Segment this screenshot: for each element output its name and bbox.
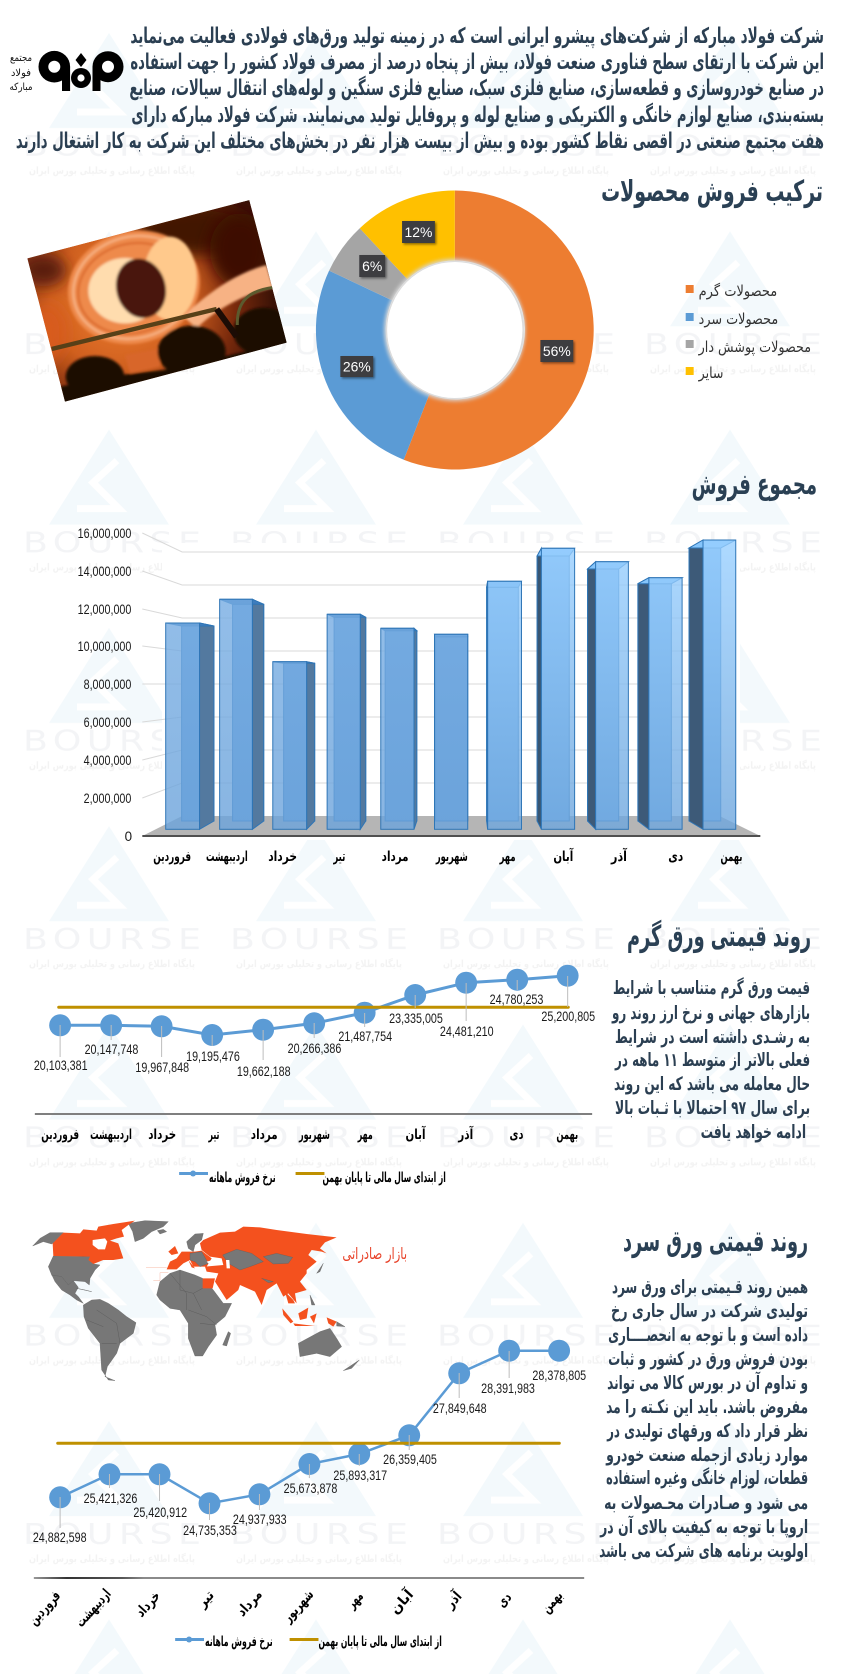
label 12%: 12% [405,224,432,240]
value labels: 27,849,648 [433,1401,487,1416]
x axis month labels: آبان [406,1125,426,1143]
value labels: 20,147,748 [85,1042,138,1057]
x axis month labels: خرداد [148,1127,176,1143]
segment: cold products 26% [316,271,429,460]
bar: Khordad [273,662,315,829]
bar: Ordibehesht [220,599,264,829]
rotated month labels: فروردین [26,1588,64,1629]
text block: hot sheet commentary: برای سال ۹۷ احتمالا با ثـبات بالا [615,1098,810,1119]
value labels: 19,967,848 [135,1060,189,1075]
value labels: 23,335,005 [389,1011,443,1026]
value labels: 20,103,381 [34,1058,88,1073]
x axis month labels: بهمن [721,849,742,865]
value labels: 25,420,912 [133,1505,187,1520]
rotated month labels: اردیبهشت [73,1586,114,1630]
line chart: cold sheet [26,1340,586,1650]
map caption: export market: بازار صادراتی [342,1244,407,1264]
value labels: 24,481,210 [440,1024,494,1039]
rotated month labels: آذر [440,1587,466,1613]
logo: Mobarakeh Steel: مجتمع [10,53,32,64]
value labels: 25,893,317 [333,1468,387,1483]
logo: Mobarakeh Steel: مبارکه [10,82,32,93]
Scandinavia [187,1233,203,1252]
x axis month labels [41,1125,578,1143]
text block: hot sheet commentary [611,977,810,1143]
value labels: 19,662,188 [237,1064,291,1079]
logo: Mobarakeh Steel [10,51,124,93]
label 56% [540,340,573,362]
bar: Mordad [381,628,417,829]
value labels [33,1368,586,1545]
chart floor [142,816,760,836]
value labels: 25,200,805 [541,1009,595,1024]
value labels: 24,882,598 [33,1530,87,1545]
legend [175,1634,442,1650]
legend: نرخ فروش ماهانه [205,1634,273,1650]
x axis month labels: دی [510,1127,523,1143]
value labels: 24,937,933 [233,1512,287,1527]
x axis month labels: مهر [357,1127,373,1143]
label 26% [340,356,373,377]
bar chart: total sales [78,526,760,865]
y axis labels: 2,000,000 [84,791,131,806]
x axis month labels: اردیبهشت [90,1127,132,1143]
value labels: 19,195,476 [186,1049,240,1064]
exporting countries [53,1221,337,1327]
rotated month labels: بهمن [538,1588,566,1617]
x axis month labels: تیر [333,849,345,865]
segment: coated products 6% [329,228,407,300]
segment: other 12% [360,190,455,279]
segment: hot products 56% [404,190,594,469]
x axis month labels: مهر [499,849,516,865]
rotated month labels: مهر [343,1589,367,1612]
donut legend: محصولات گرم [699,282,777,300]
bar: Shahrivar [435,634,468,829]
value labels: 28,391,983 [481,1381,535,1396]
y axis labels: 10,000,000 [78,639,131,654]
donut chart: product mix [316,190,594,469]
rotated month labels [26,1585,566,1630]
Australia [298,1328,342,1357]
value labels: 28,378,805 [532,1368,586,1383]
bar: Azar [588,562,628,829]
donut legend: محصولات سرد [699,310,778,328]
bar: Tir [327,614,366,829]
legend: از ابتدای سال مالی تا پایان بهمن [322,1170,446,1186]
rotated month labels: آبان [386,1585,418,1618]
label 6%: 6% [362,258,382,274]
donut legend: محصولات پوشش دار [698,338,811,357]
y axis labels: 0 [125,829,132,844]
world map: export markets [33,1221,359,1381]
donut legend: سایر [698,364,724,382]
x axis month labels: فروردین [153,849,191,865]
value labels: 25,421,326 [84,1491,137,1506]
x axis month labels: مرداد [382,849,409,865]
line chart: hot sheet [34,965,595,1186]
x axis month labels: دی [668,849,683,865]
x axis month labels: اردیبهشت [206,849,248,865]
bar: Bahman [689,540,736,829]
label 26%: 26% [343,358,371,375]
value labels [34,992,595,1079]
y axis labels: 4,000,000 [84,753,131,768]
donut hole [384,259,525,401]
bar: Aban [537,548,575,829]
x axis month labels [153,847,742,865]
label 6% [359,255,385,277]
data points [49,1340,570,1514]
donut legend [686,282,811,382]
x axis month labels: شهریور [435,849,468,865]
bar: Dey [638,578,682,829]
x axis month labels: مرداد [251,1127,278,1143]
bar: Mehr [487,581,521,829]
logo: Mobarakeh Steel: فولاد [11,68,31,79]
value labels: 20,266,386 [288,1041,341,1056]
x axis month labels: فروردین [41,1127,79,1143]
data points [49,965,579,1046]
value labels: 24,780,253 [490,992,543,1007]
x axis month labels: تیر [208,1127,219,1143]
rotated month labels: دی [494,1590,515,1611]
value labels: 26,359,405 [383,1452,437,1467]
bar: Farvardin [166,623,214,829]
value labels: 25,673,878 [284,1481,337,1496]
x axis month labels: بهمن [556,1127,578,1143]
rotated month labels: خرداد [133,1588,164,1620]
text block: cold sheet commentary [599,1277,808,1562]
y axis labels: 12,000,000 [78,602,131,617]
legend: نرخ فروش ماهانه [209,1170,276,1186]
rotated month labels: مرداد [234,1587,266,1620]
x axis month labels: آذر [610,847,628,865]
label 56%: 56% [543,343,571,359]
label 12% [402,221,435,243]
value labels: 24,735,353 [183,1523,237,1538]
y axis labels: 14,000,000 [78,564,131,579]
legend [179,1170,446,1186]
intro paragraph [16,24,824,154]
photo: hot steel coil [20,200,293,407]
y axis labels [78,526,132,844]
y axis labels: 6,000,000 [84,715,131,730]
y axis labels: 16,000,000 [78,526,131,541]
x axis month labels: خرداد [268,849,297,865]
x axis month labels: شهریور [298,1127,330,1143]
rotated month labels: تیر [194,1588,218,1612]
rotated month labels: شهریور [280,1587,317,1626]
value labels: 21,487,754 [338,1029,393,1044]
legend: از ابتدای سال مالی تا پایان بهمن [318,1634,442,1650]
y axis labels: 8,000,000 [84,677,131,692]
x axis month labels: آبان [553,847,574,865]
x axis month labels: آذر [458,1125,474,1143]
Africa [157,1270,232,1356]
